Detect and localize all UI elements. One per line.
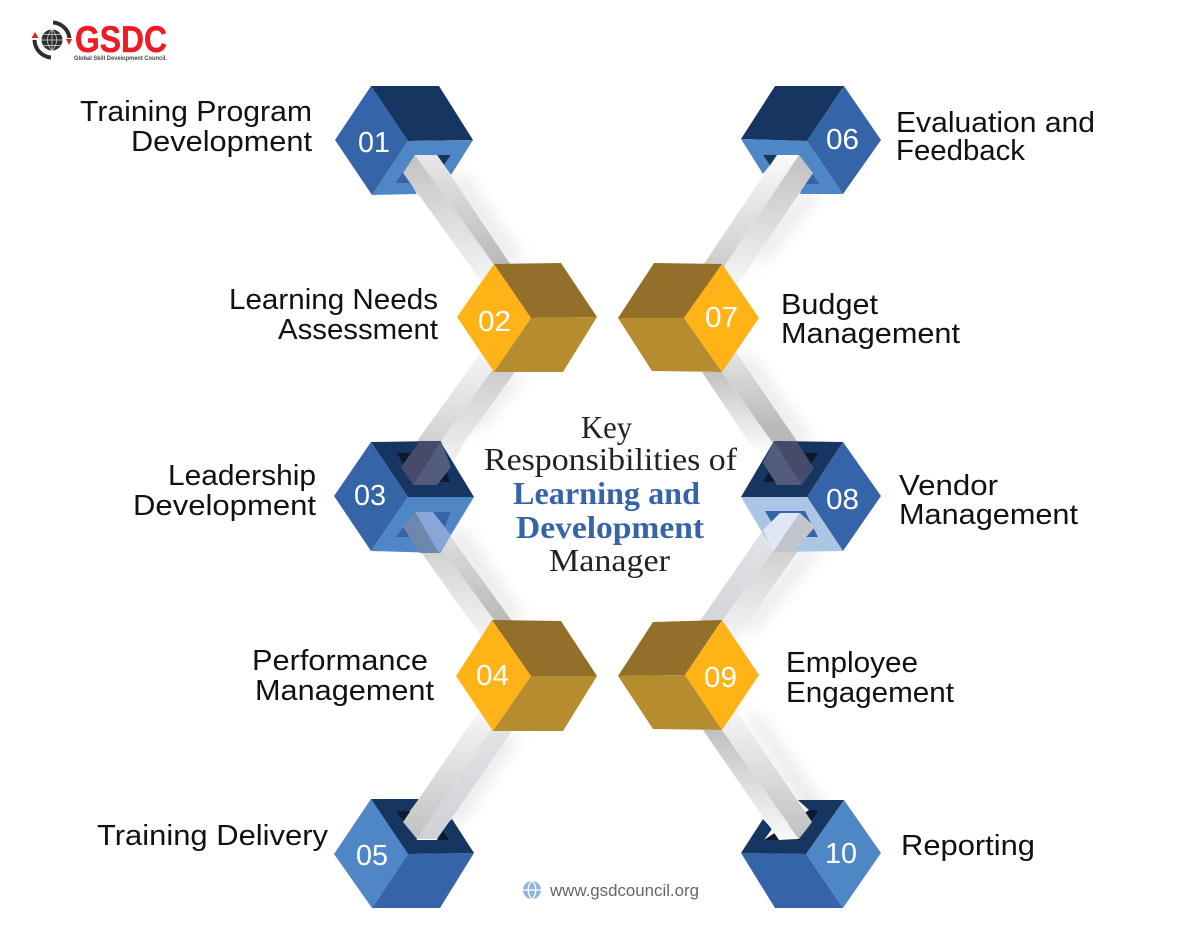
hexagon 07: [618, 263, 759, 372]
footer: website: www.gsdcouncil.org: [549, 881, 699, 900]
logo: GSDC: GSDC: [75, 19, 167, 60]
connector 08 to 09: [680, 513, 815, 650]
hexagon 08: [741, 441, 881, 552]
label: Leadership Development: Leadership: [168, 460, 316, 492]
hexagon 02: [457, 263, 597, 372]
hexagon 09: 09: [704, 662, 737, 694]
label: Employee Engagement: Employee: [786, 647, 918, 679]
hexagon 03: 03: [354, 480, 386, 512]
hexagon 08: 08: [826, 484, 859, 516]
hexagon 06: 06: [826, 124, 859, 156]
label: Reporting: Reporting: [901, 830, 1035, 862]
label: Learning Needs Assessment: Assessment: [278, 314, 438, 346]
hexagon 10: [741, 800, 881, 908]
center title: Development: [516, 509, 704, 545]
label: Vendor Management: [899, 470, 1078, 531]
connector 09 to 10: [703, 700, 812, 840]
hexagon 05: [334, 799, 474, 908]
hexagon 01: [335, 86, 473, 195]
label: Evaluation and Feedback: [896, 107, 1095, 167]
label: Training Delivery: Training Delivery: [97, 820, 329, 852]
label: Evaluation and Feedback: Evaluation and: [896, 107, 1095, 139]
label: Employee Engagement: Engagement: [786, 677, 954, 709]
center title: Manager: [549, 542, 670, 578]
center title: Key: [581, 409, 632, 445]
hexagon 07: 07: [705, 302, 738, 334]
connector 03 to 04: [403, 512, 533, 650]
label: Budget Management: Budget: [781, 289, 878, 321]
center title: Responsibilities of: [484, 441, 737, 477]
label: Vendor Management: Vendor: [899, 470, 998, 502]
hexagon 02: 02: [478, 306, 511, 338]
label: Evaluation and Feedback: Feedback: [896, 135, 1026, 167]
connector 04 to 05: [403, 705, 530, 839]
connector 07 to 08: [702, 345, 803, 450]
hexagon 04: [456, 620, 597, 731]
logo: GSDC: [32, 19, 167, 62]
center title: Learning and: [513, 475, 700, 511]
connector 02 to 03: [401, 340, 538, 485]
label: Training Program Development: Development: [131, 126, 312, 158]
label: Training Program Development: Training Program: [80, 96, 312, 128]
hexagon 05: 05: [356, 840, 388, 872]
hexagon 04: 04: [476, 660, 509, 692]
hexagon 01: 01: [358, 127, 390, 159]
hexagon 06: [741, 86, 881, 194]
hexagon 09: [618, 620, 759, 730]
label: Budget Management: [781, 289, 960, 350]
logo: GSDC: Global Skill Development Council.: [74, 55, 167, 62]
center title: [484, 409, 737, 578]
label: Employee Engagement: [786, 647, 954, 709]
connector shadows: [440, 175, 830, 825]
label: Vendor Management: Management: [899, 499, 1078, 531]
connector 06 to 07: [683, 155, 813, 295]
label: Performance Management: [252, 645, 434, 707]
label: Training Program Development: [80, 96, 312, 158]
label: Learning Needs Assessment: Learning Needs: [229, 284, 438, 316]
label: Performance Management: Performance: [252, 645, 428, 677]
label: Performance Management: Management: [255, 675, 434, 707]
hexagon 10: 10: [825, 838, 857, 870]
label: Leadership Development: Development: [133, 490, 316, 522]
label: Learning Needs Assessment: [229, 284, 438, 346]
label: Budget Management: Management: [781, 318, 960, 350]
label: Leadership Development: [133, 460, 316, 522]
hexagon 03: [334, 441, 474, 553]
connector 01 to 02: [403, 155, 531, 295]
